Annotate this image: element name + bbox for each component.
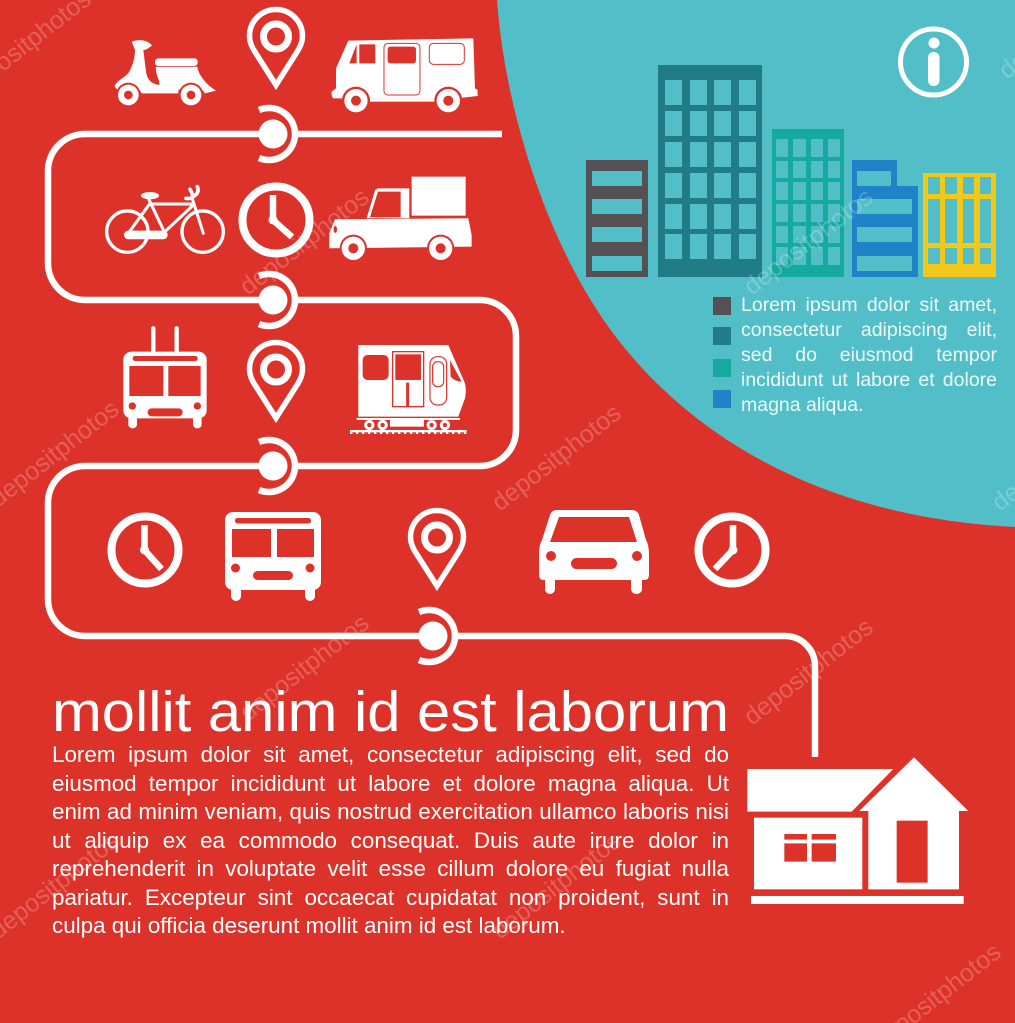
icon: location pin middle <box>250 342 302 418</box>
building: yellow <box>923 173 996 277</box>
body paragraph: culpa qui officia deserunt mollit anim id est laborum. <box>52 913 566 938</box>
body paragraph: Lorem ipsum dolor sit amet, consectetur adipiscing elit, sed do <box>52 742 729 767</box>
building: blue <box>852 160 918 277</box>
icon: car <box>539 510 649 594</box>
watermarks: depositphotos <box>486 399 626 517</box>
route line <box>48 134 815 757</box>
icon: bicycle <box>107 187 223 252</box>
icon: scooter <box>115 40 216 107</box>
icon: info <box>900 29 966 95</box>
body paragraph: reprehenderit in voluptate velit esse cillum dolore eu fugiat nulla <box>52 856 729 881</box>
legend text: consectetur adipiscing elit, <box>741 319 997 341</box>
icon: house <box>747 757 968 904</box>
body paragraph: pariatur. Excepteur sint occaecat cupidatat non proident, sunt in <box>52 884 729 910</box>
building: green teal <box>772 129 844 277</box>
legend text: magna aliqua. <box>741 394 864 416</box>
watermarks: depositphotos <box>738 183 878 301</box>
route node 3 <box>258 440 297 492</box>
watermarks: depositphotos <box>738 613 878 731</box>
icon: clock three <box>698 516 766 584</box>
body paragraph: eiusmod tempor incididunt ut labore et dolore magna aliqua. Ut <box>52 770 729 796</box>
body paragraph: ut aliquip ex ea commodo consequat. Duis aute irure dolor in <box>52 828 729 852</box>
icon: van <box>332 38 478 115</box>
teal corner panel <box>497 0 1015 527</box>
icon: location pin top <box>250 10 302 85</box>
building: dark teal tower <box>658 65 762 277</box>
icon: pickup truck <box>329 177 472 262</box>
icon: trolleybus <box>123 328 207 428</box>
legend text: incididunt ut labore et dolore <box>741 369 997 391</box>
route node 4 <box>418 610 457 662</box>
icon: clock one <box>242 186 310 254</box>
body paragraph: enim ad minim veniam, quis nostrud exercitation ullamco laboris nisi <box>52 799 729 824</box>
heading: mollit anim id est laborum <box>52 680 729 744</box>
route node 1 <box>258 108 297 160</box>
icon: bus <box>225 512 321 601</box>
icon: location pin lower <box>410 510 464 586</box>
legend colour swatches <box>713 297 731 408</box>
icon: train <box>350 345 467 432</box>
legend text: Lorem ipsum dolor sit amet, <box>741 294 997 316</box>
legend text: sed do eiusmod tempor <box>741 344 997 366</box>
watermarks: depositphotos <box>486 827 626 945</box>
legend text <box>741 294 997 416</box>
building: grey <box>586 160 648 277</box>
route node 2 <box>258 274 297 326</box>
watermarks: depositphotos <box>234 609 374 727</box>
icon: clock two <box>112 516 178 584</box>
watermarks: depositphotos <box>234 183 374 301</box>
body paragraph <box>52 742 729 938</box>
